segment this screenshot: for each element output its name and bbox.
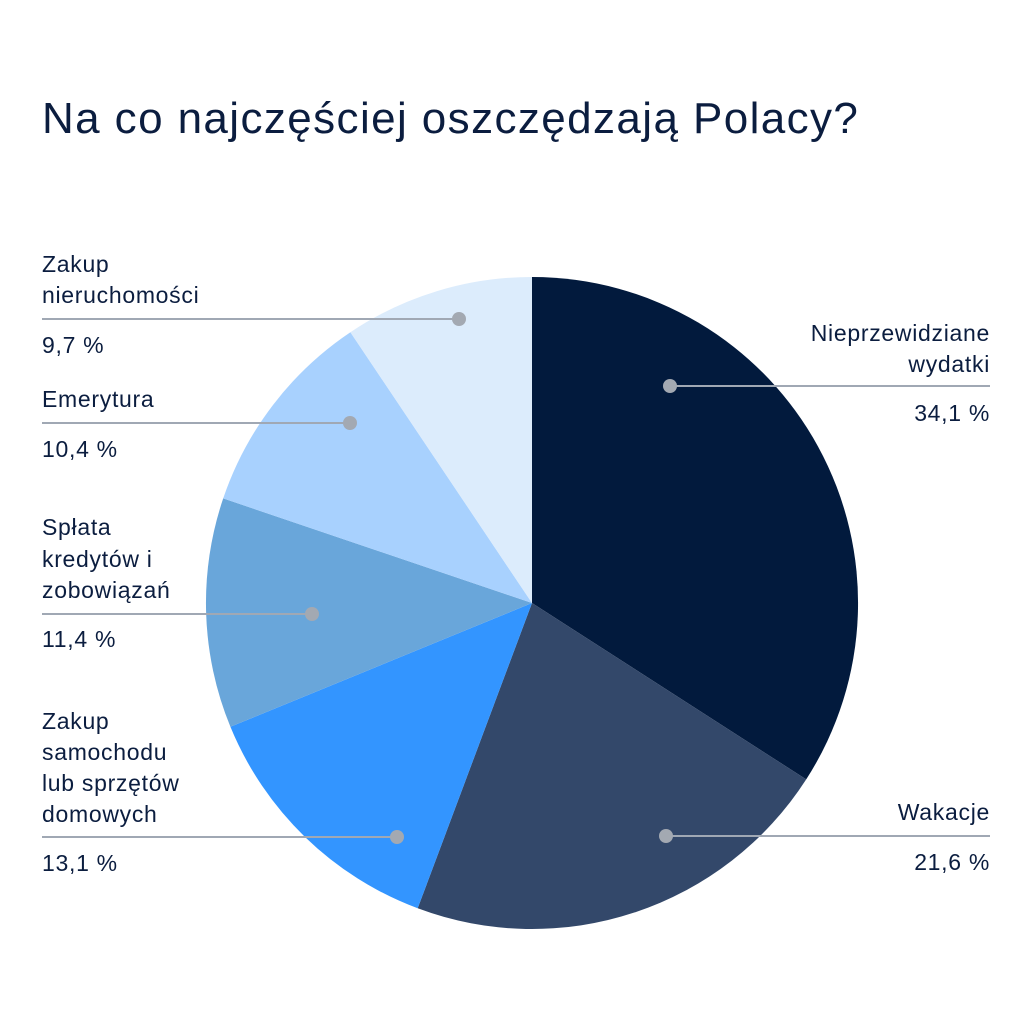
label: Wakacje: 21,6 % bbox=[914, 849, 990, 875]
label: Spłata kredytów i zobowiązań: zobowiązań bbox=[42, 577, 170, 603]
label: Wakacje: Wakacje bbox=[898, 799, 990, 825]
label: Zakup samochodu lub sprzętów domowych: 13,1 % bbox=[42, 850, 118, 876]
label: Spłata kredytów i zobowiązań: kredytów i bbox=[42, 546, 153, 572]
label: Zakup nieruchomości: nieruchomości bbox=[42, 282, 199, 308]
label: Zakup nieruchomości: Zakup bbox=[42, 251, 109, 277]
label: Nieprzewidziane wydatki: wydatki bbox=[907, 351, 990, 377]
label: Zakup samochodu lub sprzętów domowych: Zakup bbox=[42, 708, 109, 734]
label: Zakup nieruchomości bbox=[42, 251, 466, 358]
label: Nieprzewidziane wydatki: Nieprzewidziane bbox=[811, 320, 990, 346]
label: Zakup samochodu lub sprzętów domowych: samochodu bbox=[42, 739, 167, 765]
label: Emerytura: 10,4 % bbox=[42, 436, 118, 462]
label: Zakup samochodu lub sprzętów domowych: domowych bbox=[42, 801, 158, 827]
title: Na co najczęściej oszczędzają Polacy? bbox=[42, 94, 859, 143]
label: Emerytura bbox=[42, 386, 357, 462]
label: Nieprzewidziane wydatki: 34,1 % bbox=[914, 400, 990, 426]
label: Emerytura: Emerytura bbox=[42, 386, 154, 412]
label: Spłata kredytów i zobowiązań: 11,4 % bbox=[42, 626, 116, 652]
label: Zakup samochodu lub sprzętów domowych bbox=[42, 708, 404, 876]
label: Spłata kredytów i zobowiązań bbox=[42, 514, 319, 652]
label: Zakup nieruchomości: 9,7 % bbox=[42, 332, 104, 358]
label: Nieprzewidziane wydatki bbox=[663, 320, 990, 426]
label: Wakacje bbox=[659, 799, 990, 875]
label: Zakup samochodu lub sprzętów domowych: lub sprzętów bbox=[42, 770, 180, 796]
pie chart bbox=[206, 277, 858, 929]
label: Spłata kredytów i zobowiązań: Spłata bbox=[42, 514, 111, 540]
